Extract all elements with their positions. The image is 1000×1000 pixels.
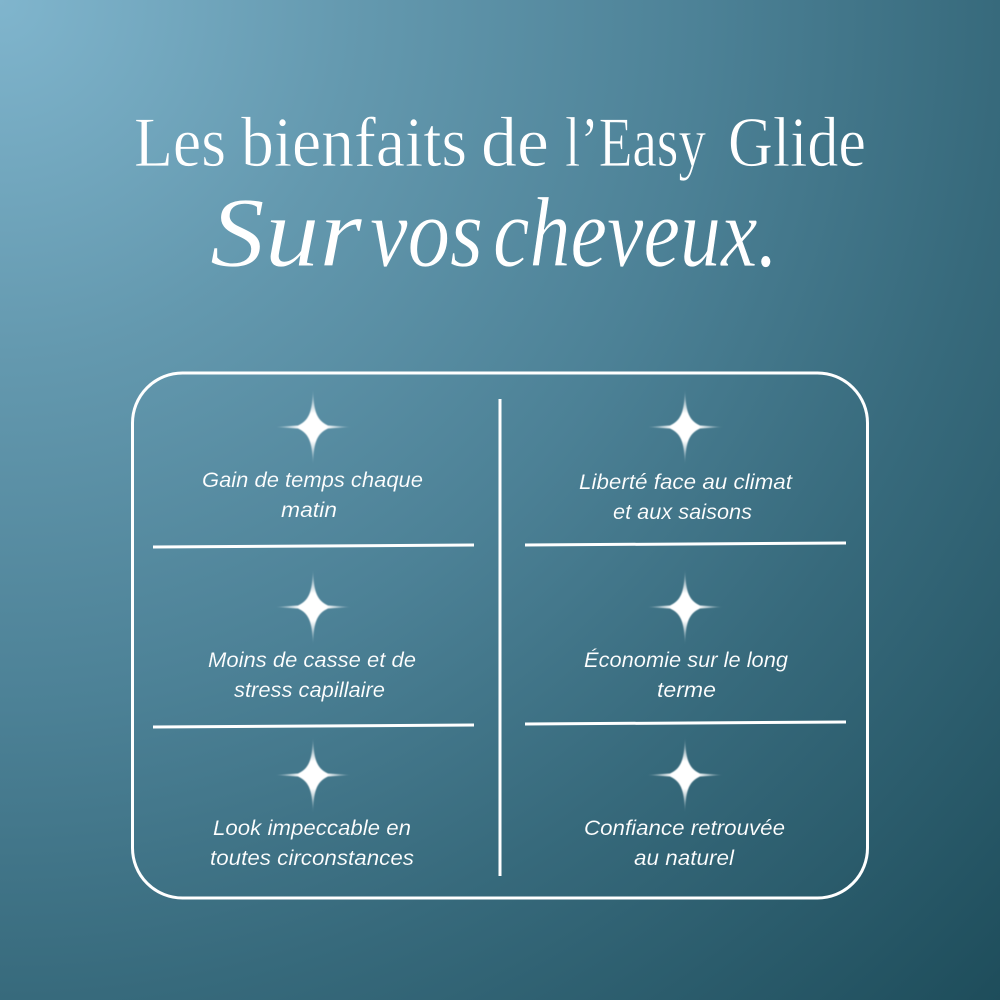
benefit text: Liberté face au climat: [579, 471, 793, 494]
benefit text: terme: [657, 679, 716, 702]
benefit text: Économie sur le long: [584, 649, 788, 672]
title line 2: vos: [370, 177, 483, 288]
panel: benefits: [132, 373, 868, 898]
benefit text: au naturel: [634, 847, 735, 870]
title line 1: Les: [134, 104, 226, 182]
benefit text: et aux saisons: [613, 501, 753, 524]
title line 1: de: [481, 104, 549, 182]
column divider: [498, 399, 502, 876]
benefit: moins de casse: [208, 569, 416, 702]
benefit text: [584, 649, 788, 702]
title line 1: bienfaits: [241, 104, 467, 182]
benefit text: Moins de casse et de: [208, 649, 416, 672]
title line 2: cheveux.: [493, 177, 778, 288]
title line 1: Glide: [728, 104, 866, 182]
icon: sparkle: [647, 569, 723, 645]
row divider right 1: [525, 543, 846, 545]
benefit text: Confiance retrouvée: [584, 817, 785, 840]
icon: sparkle: [647, 389, 723, 465]
benefit: gain de temps: [202, 389, 423, 522]
row divider left 1: [153, 545, 474, 547]
benefit text: Look impeccable en: [213, 817, 411, 840]
benefit text: Gain de temps chaque: [202, 469, 423, 492]
icon: sparkle: [275, 737, 351, 813]
benefit text: stress capillaire: [234, 679, 385, 702]
benefit text: [202, 469, 423, 522]
benefit text: [208, 649, 416, 702]
panel outline: [132, 373, 868, 898]
title line 2: Sur: [210, 177, 363, 288]
icon: sparkle: [647, 737, 723, 813]
row divider right 2: [525, 722, 846, 724]
benefit text: toutes circonstances: [210, 847, 415, 870]
benefit text: [579, 471, 793, 524]
icon: sparkle: [275, 569, 351, 645]
benefit text: matin: [281, 499, 337, 522]
icon: sparkle: [275, 389, 351, 465]
benefit: look impeccable: [210, 737, 415, 870]
benefit: économie: [584, 569, 788, 702]
benefit text: [210, 817, 415, 870]
benefit text: [584, 817, 785, 870]
benefit: confiance: [584, 737, 785, 870]
title line 1: l’Easy: [565, 104, 706, 182]
benefit: liberté: [579, 389, 793, 524]
row divider left 2: [153, 725, 474, 727]
title: [134, 104, 866, 288]
